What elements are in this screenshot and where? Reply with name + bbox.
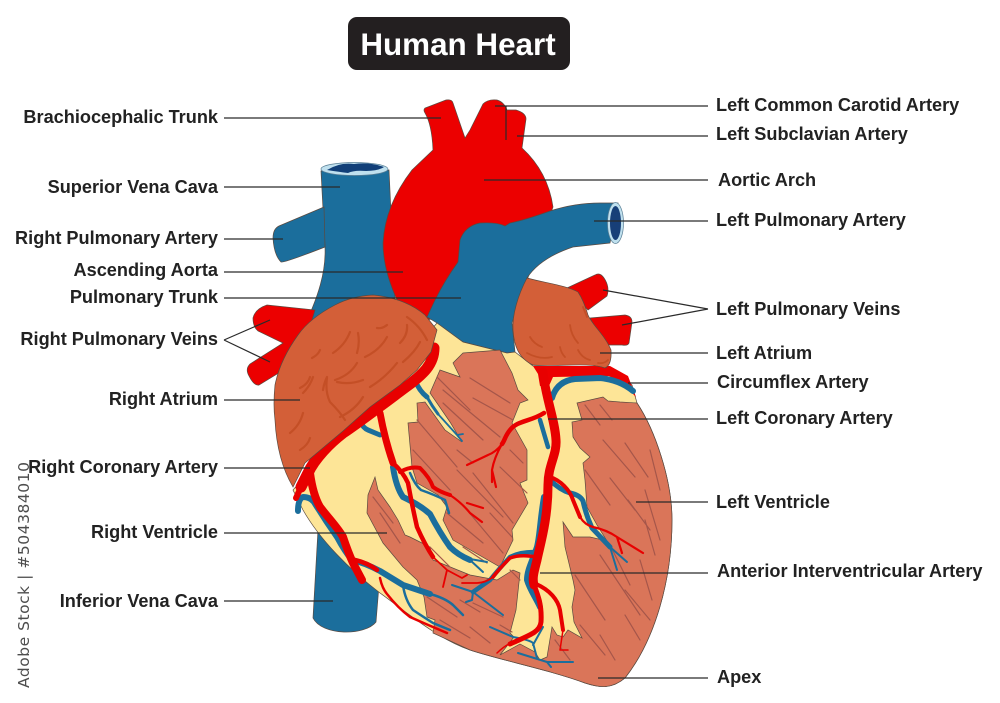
- left atrium folds: [527, 307, 608, 363]
- label: Anterior Interventricular Artery: Anterior Interventricular Artery: [717, 561, 982, 581]
- heart illustration: [247, 100, 672, 687]
- label: Right Coronary Artery: Right Coronary Artery: [28, 457, 218, 477]
- right labels: [484, 95, 982, 687]
- title: [348, 17, 570, 70]
- label: Right Ventricle: Right Ventricle: [91, 522, 218, 542]
- label: Left Pulmonary Veins: [603, 290, 900, 325]
- label: Apex: Apex: [717, 667, 761, 687]
- label: Left Pulmonary Veins: Left Pulmonary Veins: [716, 299, 900, 319]
- ventricles fat layer: [293, 323, 672, 687]
- pulmonary trunk and left pulmonary artery: [427, 203, 618, 353]
- label: Left Common Carotid Artery: Left Common Carotid Artery: [716, 95, 959, 115]
- label: Circumflex Artery: Circumflex Artery: [717, 372, 869, 392]
- SVC opening: [321, 162, 388, 176]
- coronary veins: [298, 377, 633, 667]
- title: Human Heart: [360, 27, 556, 62]
- left pulmonary veins: [567, 274, 632, 345]
- superior vena cava: [300, 170, 440, 335]
- ventricle muscle: left ventricle, right ventricle and lower wall: [367, 397, 672, 687]
- label: Right Pulmonary Veins: Right Pulmonary Veins: [20, 329, 218, 349]
- coronary arteries: [296, 348, 643, 653]
- label: Left Pulmonary Artery: Left Pulmonary Artery: [716, 210, 906, 230]
- label: Brachiocephalic Trunk: Brachiocephalic Trunk: [23, 107, 219, 127]
- aorta: [383, 100, 553, 320]
- right pulmonary veins: [247, 305, 315, 385]
- left pulmonary artery opening: [608, 202, 624, 244]
- right pulmonary artery branch: [273, 207, 325, 262]
- label: Pulmonary Trunk: Pulmonary Trunk: [70, 287, 219, 307]
- left atrium: [513, 278, 611, 368]
- label: Left Subclavian Artery: Left Subclavian Artery: [716, 124, 908, 144]
- label: Right Pulmonary Artery: Right Pulmonary Artery: [15, 228, 218, 248]
- label: Left Ventricle: Left Ventricle: [716, 492, 830, 512]
- label: Right Pulmonary Veins: [20, 320, 270, 362]
- label: Left Common Carotid Artery: [495, 95, 959, 140]
- label: Aortic Arch: Aortic Arch: [718, 170, 816, 190]
- label: Inferior Vena Cava: Inferior Vena Cava: [60, 591, 219, 611]
- left labels: [15, 107, 461, 611]
- muscle fibres: [373, 377, 660, 660]
- ventricle muscle: central patch: [408, 350, 528, 567]
- inferior vena cava: [313, 530, 379, 632]
- right atrium: [274, 295, 437, 487]
- label: Left Atrium: Left Atrium: [716, 343, 812, 363]
- stock id side text: Adobe Stock | #504384010: [15, 462, 33, 688]
- circumflex artery red band: [533, 366, 636, 397]
- right atrium folds: [290, 317, 427, 450]
- label: Right Atrium: Right Atrium: [109, 389, 218, 409]
- label: Ascending Aorta: Ascending Aorta: [74, 260, 219, 280]
- label: Left Coronary Artery: Left Coronary Artery: [716, 408, 893, 428]
- label: Superior Vena Cava: Superior Vena Cava: [48, 177, 219, 197]
